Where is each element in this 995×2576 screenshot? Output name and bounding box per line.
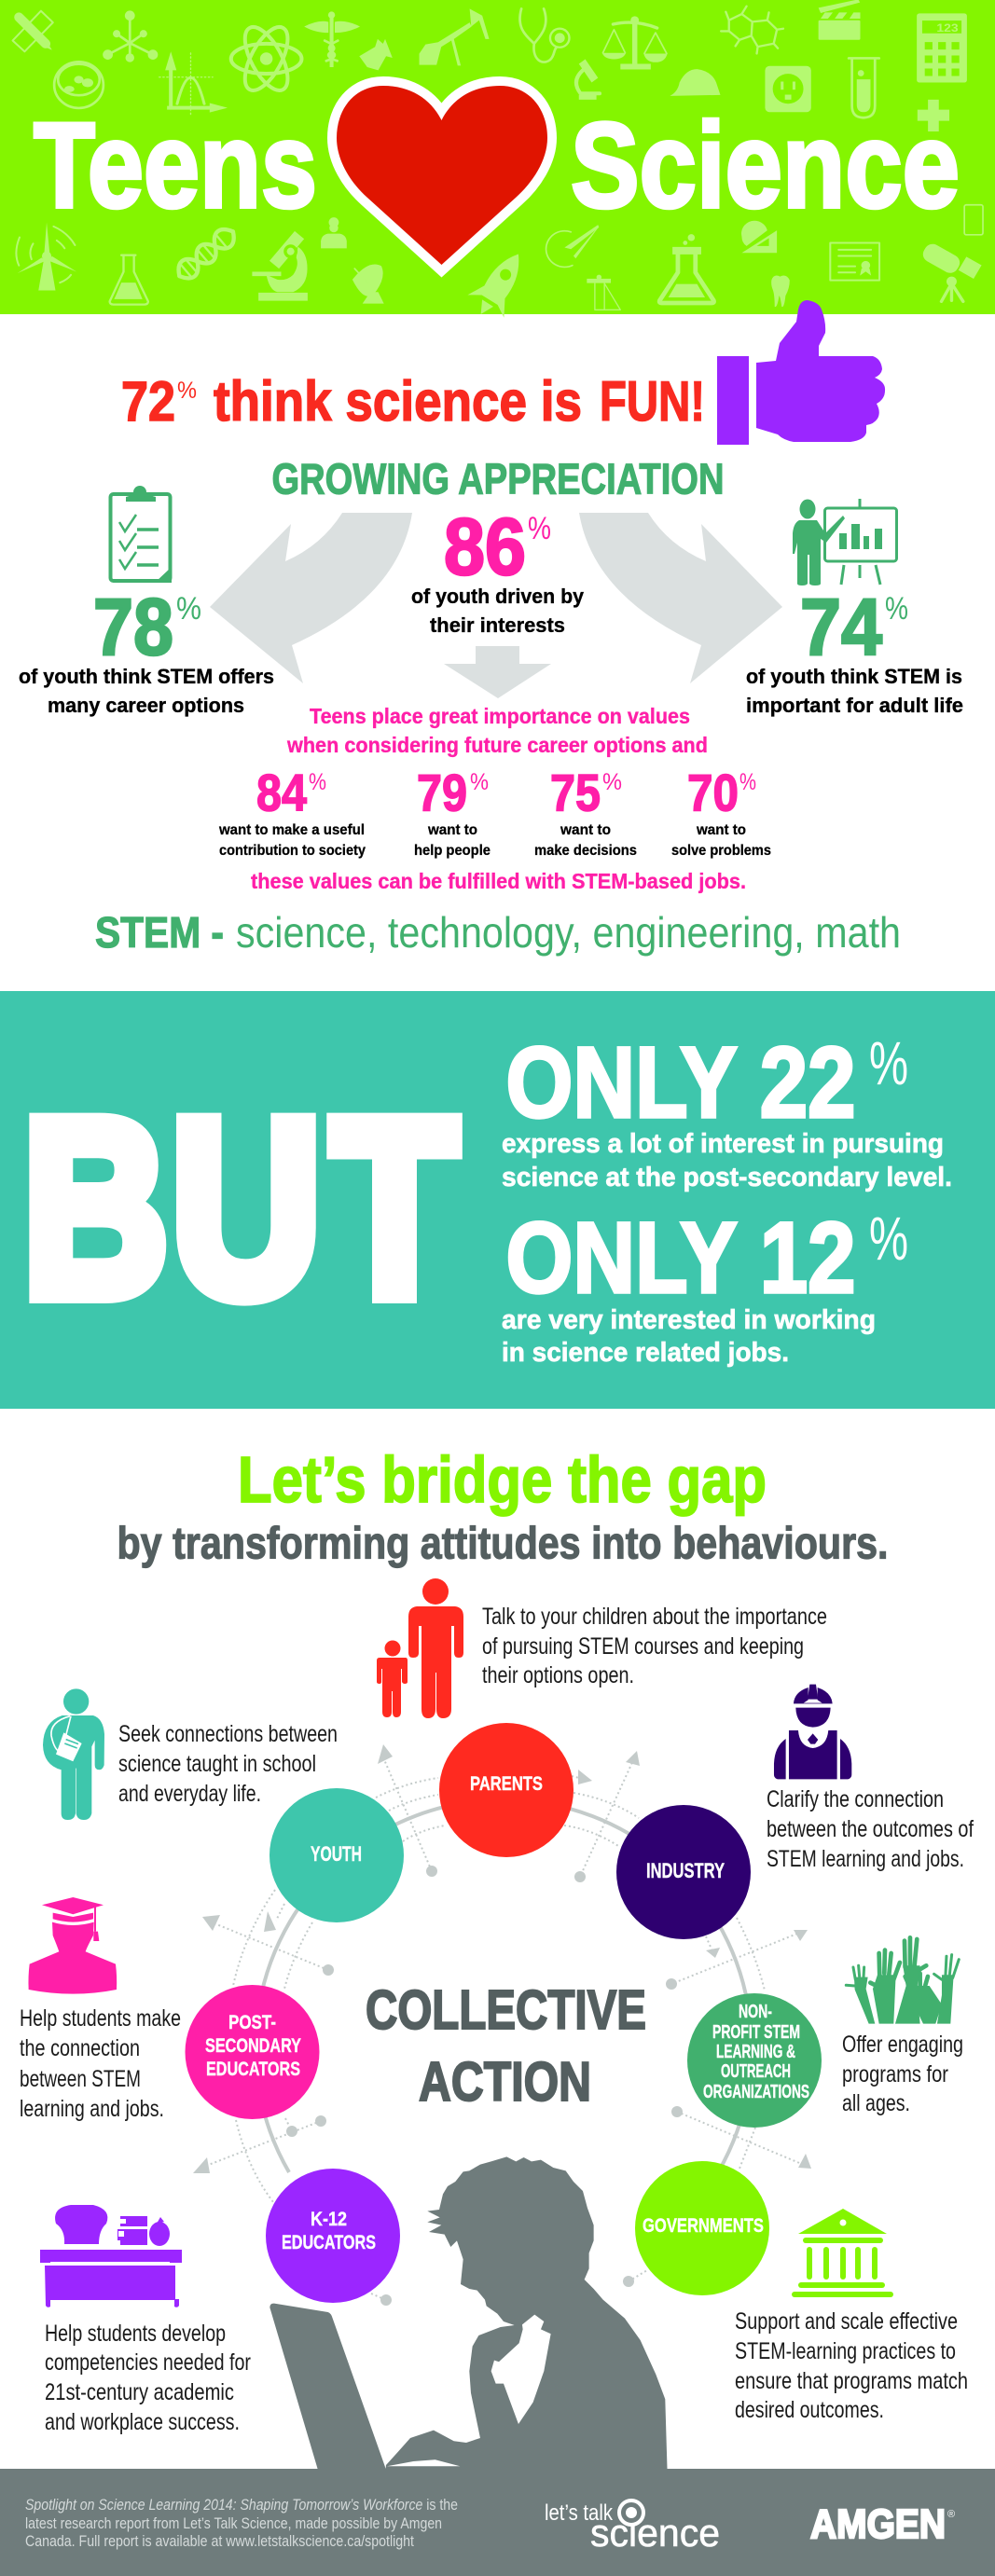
text: non-profit (842, 2032, 963, 2116)
logo: Amgen: ® (947, 2509, 955, 2520)
stat: 75%: % (602, 769, 622, 795)
heading: let's bridge the gap: Let’s bridge the gap (238, 1443, 767, 1516)
logo: let's talk science (545, 2500, 720, 2555)
circle: non-profit organizations: PROFIT STEM (712, 2022, 800, 2043)
connector dots (286, 1866, 683, 2306)
heading: growing appreciation: GROWING APPRECIATION (272, 455, 724, 503)
text: values conclusion: these values can be fulfilled with STEM-based jobs. (251, 869, 746, 893)
footer text: latest research report from Let’s Talk Science, made possible by Amgen (25, 2514, 442, 2532)
hole between hand and body (491, 2315, 551, 2424)
circle: industry (616, 1805, 751, 1939)
stat: 78% (19, 583, 274, 717)
person (385, 2156, 668, 2473)
text: K-12 (45, 2321, 251, 2435)
stat: 72% think science is FUN: 72 (121, 369, 175, 433)
text: youth (118, 1721, 338, 1807)
stat: 74%: % (885, 591, 908, 627)
stat: 78%: of youth think STEM offers (19, 665, 274, 688)
stat: 78%: 78 (93, 583, 173, 672)
circle: governments: GOVERNMENTS (643, 2215, 764, 2237)
stat: only 12%: are very interested in working (502, 1305, 876, 1335)
text: non-profit: Offer engaging (842, 2032, 963, 2058)
icon: government building (792, 2209, 893, 2297)
text: governments: desired outcomes. (735, 2397, 884, 2423)
circle: non-profit organizations: OUTREACH (721, 2061, 791, 2082)
text: youth: and everyday life. (118, 1781, 261, 1807)
text: values intro: Teens place great importance on values (310, 704, 690, 728)
stat: 78%: % (176, 591, 201, 627)
icon: petri dish (54, 62, 104, 108)
icon: worker (321, 217, 347, 248)
stat: 70% (671, 765, 771, 859)
stat: 84%: % (309, 769, 326, 795)
icon: calculator (917, 13, 967, 83)
circle: parents (439, 1723, 574, 1857)
stat: only 12%: % (869, 1204, 908, 1273)
stat: 75% (534, 765, 637, 859)
text: K-12: competencies needed for (45, 2349, 251, 2376)
stat: only 12%: ONLY 12 (505, 1201, 856, 1314)
arrow: curved left (210, 513, 412, 683)
icon: DNA helix (173, 224, 240, 283)
stat: 75%: 75 (550, 765, 601, 822)
circle: non-profit organizations: NON- (739, 2002, 772, 2022)
header banner (0, 0, 995, 325)
stat: 86% (411, 503, 585, 637)
stat: only 22%: science at the post-secondary level. (502, 1163, 952, 1192)
heading: BUT: B (23, 1068, 168, 1347)
subheading: transforming attitudes: by transforming attitudes into behaviours. (117, 1520, 888, 1568)
icon: microscope (252, 231, 308, 301)
text: post-secondary: the connection (20, 2035, 140, 2061)
stat: 84% (218, 765, 366, 859)
icon: parent and child (377, 1578, 463, 1718)
icon: graduate (28, 1897, 117, 1994)
stat: 84%: want to make a useful (218, 822, 365, 838)
stat: 72% think science is FUN: think science is (214, 369, 582, 433)
header background science icons, right half (519, 0, 983, 310)
title: Teens: Teens (34, 97, 317, 233)
icon: stethoscope (519, 8, 569, 62)
text: K-12: 21st-century academic (45, 2379, 234, 2405)
circle: parents: PARENTS (470, 1773, 543, 1795)
stat: 79%: help people (414, 843, 491, 859)
stat: 70%: want to (696, 822, 746, 838)
text: values intro: when considering future career options and (286, 733, 708, 757)
icon: hexagon molecule (721, 7, 783, 53)
stat: 86%: of youth driven by (411, 585, 585, 608)
circle: non-profit organizations (687, 1993, 822, 2128)
footer text: Canada. Full report is available at www.letstalkscience.ca/spotlight (25, 2532, 414, 2550)
text: post-secondary: between STEM (20, 2066, 141, 2092)
circle: K-12 educators: K-12 (311, 2209, 347, 2230)
footer band (0, 2469, 995, 2576)
heading: BUT: T (332, 1068, 457, 1347)
stat: 70%: % (739, 769, 756, 795)
text: parents (482, 1604, 827, 1688)
stat: only 12% (502, 1201, 908, 1368)
circle: youth: YOUTH (311, 1842, 362, 1866)
heading: BUT (23, 1068, 457, 1347)
icon: satellite dish (352, 265, 384, 304)
text: STEM definition: science, technology, engineering, math (236, 908, 901, 957)
icon: pumpjack (420, 8, 490, 65)
circle: industry: INDUSTRY (646, 1859, 725, 1882)
stat: 74%: of youth think STEM is (746, 665, 962, 688)
logo: let's talk science: let’s talk (545, 2500, 614, 2526)
circle: post-secondary educators: EDUCATORS (206, 2059, 300, 2080)
stat: 79% (414, 765, 491, 859)
icon: test tube (849, 58, 879, 117)
icon: tooth (771, 276, 790, 307)
icon: telescope (920, 241, 982, 301)
text: parents: Talk to your children about the importance (482, 1604, 827, 1630)
heading: collective action: COLLECTIVE (366, 1979, 646, 2041)
stat: only 22% (502, 1026, 952, 1192)
stat: 86%: their interests (430, 613, 565, 637)
icon: T-square and triangle (587, 275, 620, 310)
text: governments (735, 2308, 968, 2423)
circle: K-12 educators (266, 2169, 400, 2303)
stat: 74%: important for adult life (746, 694, 963, 717)
text: youth: science taught in school (118, 1751, 316, 1777)
icon: erlenmeyer flask (659, 234, 714, 303)
icon: small microscope (576, 59, 600, 100)
arrow: down (444, 646, 551, 698)
heading: collective action: ACTION (419, 2051, 591, 2113)
circle: non-profit organizations: LEARNING & (716, 2042, 795, 2062)
icon: heart (337, 86, 547, 265)
icon: construction worker (774, 1685, 851, 1779)
icon: graph (159, 51, 228, 116)
heading: collective action (366, 1979, 646, 2113)
text: post-secondary: learning and jobs. (20, 2096, 164, 2122)
stat: 72% think science is FUN: FUN! (600, 369, 705, 433)
text: STEM definition: STEM - (95, 908, 224, 957)
icon: caduceus (304, 11, 360, 67)
stat: 70%: solve problems (671, 843, 771, 859)
footer text (25, 2496, 458, 2550)
circle: non-profit organizations: ORGANIZATIONS (703, 2082, 809, 2102)
icon: clapperboard (819, 0, 861, 40)
icon: hard hat (670, 69, 720, 96)
stat: 79%: 79 (417, 765, 467, 822)
circle: post-secondary educators: POST- (228, 2012, 276, 2033)
text: industry (767, 1786, 974, 1872)
stat: 86%: 86 (444, 503, 526, 592)
circle: K-12 educators: EDUCATORS (282, 2232, 376, 2253)
footer text: Spotlight on Science Learning 2014: Shaping Tomorrow’s Workforce is the (25, 2496, 458, 2514)
text: K-12: Help students develop (45, 2321, 226, 2347)
heading: BUT: U (172, 1068, 321, 1347)
icon: clipboard checklist (110, 486, 172, 583)
text: non-profit: programs for (842, 2061, 948, 2087)
icon: rocket (463, 242, 536, 325)
stat: only 12%: in science related jobs. (502, 1338, 789, 1368)
icon: compass drawing tool (546, 225, 599, 267)
stat: 74%: 74 (800, 583, 882, 672)
icon: student with backpack (43, 1688, 104, 1820)
circle: post-secondary educators: SECONDARY (205, 2035, 301, 2057)
stat: 75%: want to (560, 822, 611, 838)
text: parents: of pursuing STEM courses and keeping (482, 1633, 804, 1660)
collective action network connectors (193, 1744, 811, 2306)
stat: 79%: want to (427, 822, 477, 838)
stat: 84%: contribution to society (219, 843, 366, 859)
text: post-secondary: Help students make (20, 2005, 181, 2032)
text: non-profit: all ages. (842, 2090, 910, 2116)
icon: certificate (830, 243, 879, 281)
text: industry: Clarify the connection (767, 1786, 944, 1812)
icon: presenter with chart (793, 499, 897, 585)
icon: smartphone (964, 205, 983, 235)
connector arrowheads (193, 1744, 811, 2173)
arrow: curved right (579, 513, 782, 683)
text: parents: their options open. (482, 1662, 634, 1688)
icon: calculator: 123 (936, 21, 959, 34)
circle: governments (635, 2161, 769, 2295)
icon: ruler and pencil (13, 11, 53, 51)
text: youth: Seek connections between (118, 1721, 338, 1747)
icon: teacher desk with books and apple (40, 2205, 182, 2307)
icon: set square and protractor (741, 221, 777, 253)
icon: molecule (103, 10, 158, 62)
icon: raised hands (846, 1937, 959, 2024)
stat: 70%: 70 (687, 765, 739, 822)
stat: 84%: 84 (256, 765, 307, 822)
laptop (269, 2304, 387, 2473)
text: K-12: and workplace success. (45, 2409, 240, 2435)
stat: only 22%: express a lot of interest in pursuing (502, 1129, 944, 1159)
icon: balance scales (602, 16, 668, 69)
logo: let's talk science: science (590, 2511, 720, 2555)
stat: 75%: make decisions (534, 843, 637, 859)
icon: medical cross (918, 100, 949, 131)
stat: only 22%: ONLY 22 (505, 1026, 856, 1138)
stat: 78%: many career options (48, 694, 244, 717)
icon: atom (231, 21, 301, 97)
stat: 74% (746, 583, 963, 717)
circle: post-secondary educators (185, 1985, 319, 2119)
silhouette: person at laptop (269, 2156, 668, 2473)
icon: dog (359, 39, 393, 70)
stat: 79%: % (470, 769, 489, 795)
icon: flask (110, 255, 148, 305)
text: values intro (286, 704, 708, 757)
header background science icons, left half (13, 8, 490, 305)
text: post-secondary (20, 2005, 181, 2122)
icon: thumbs up (717, 300, 885, 445)
circle: youth (269, 1788, 404, 1922)
icon: power outlet (765, 66, 811, 112)
stat: 86%: % (528, 511, 551, 546)
icon: wind turbine (16, 223, 76, 291)
stat: only 22%: % (869, 1028, 908, 1097)
stat: 72% think science is FUN: % (177, 378, 197, 404)
panel: BUT (0, 991, 995, 1409)
logo: Amgen: AMGEN (810, 2501, 946, 2547)
